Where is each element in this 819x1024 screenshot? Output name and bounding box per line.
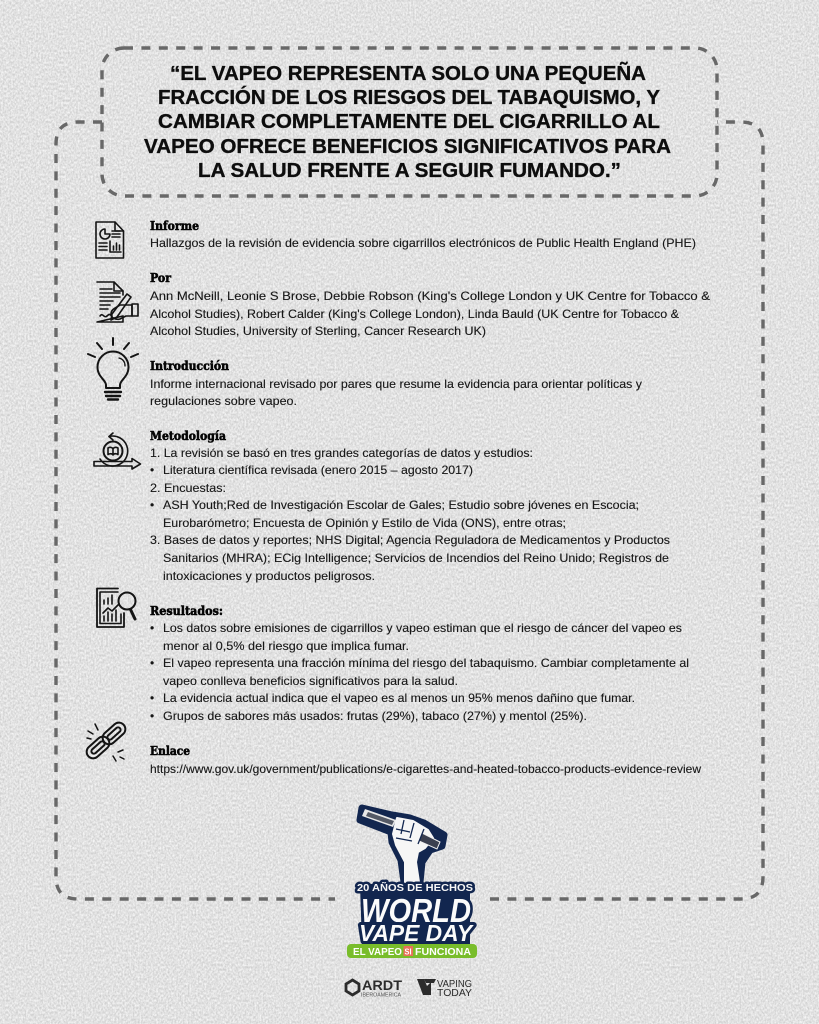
title quote: CAMBIAR COMPLETAMENTE DEL CIGARRILLO AL (158, 110, 660, 133)
section: Metodología: ASH Youth;Red de Investigación Escolar de Gales; Estudio sobre jóvenes en Escocia; (163, 498, 639, 512)
title quote: VAPEO OFRECE BENEFICIOS SIGNIFICATIVOS PARA (144, 135, 671, 158)
section: Por: Por (150, 271, 172, 285)
section: Metodología: Literatura científica revisada (enero 2015 – agosto 2017) (163, 463, 473, 477)
section: Por (150, 271, 710, 338)
section: Metodología: 3. Bases de datos y reportes; NHS Digital; Agencia Reguladora de Medicamentos y Productos (150, 533, 670, 547)
logo: navy wordmark backing (360, 884, 470, 946)
section: Metodología: Eurobarómetro; Encuesta de Opinión y Estilo de Vida (ONS), entre otras; (163, 516, 566, 530)
icon: light bulb (88, 338, 138, 400)
section: Informe (150, 219, 696, 250)
icon: chart report with magnifier (97, 588, 136, 627)
section: Informe: Informe (150, 219, 199, 233)
logo: green slogan pill: SI (404, 946, 412, 956)
section: Introducción: Introducción (150, 359, 229, 373)
section: Metodología: • (150, 463, 154, 477)
icon: broken chain link (84, 720, 128, 761)
icon: report document (96, 222, 124, 258)
section: Enlace (150, 744, 701, 776)
section: Resultados: vapeo conlleva beneficios significativos para la salud. (163, 674, 458, 688)
logo: ARDT Iberoamerica: ARDT (362, 977, 402, 993)
section: Por: Ann McNeill, Leonie S Brose, Debbie Robson (King's College London y UK Centre for Tobacco & (150, 289, 710, 303)
section: Enlace: Enlace (150, 744, 190, 758)
logo: Vape Day: VAPE DAY (359, 920, 475, 946)
logo: Vaping Today (417, 978, 472, 999)
section: Resultados: Grupos de sabores más usados: frutas (29%), tabaco (27%) y mentol (25%). (163, 709, 587, 723)
title quote (144, 62, 671, 182)
section: Metodología: Sanitarios (MHRA); ECig Intelligence; Servicios de Incendios del Reino Unido; Registros de (163, 551, 669, 565)
section: Resultados: La evidencia actual indica que el vapeo es al menos un 95% menos dañino que fumar. (163, 691, 635, 705)
logo: World Vape Day (347, 808, 477, 958)
title quote: FRACCIÓN DE LOS RIESGOS DEL TABAQUISMO, Y (158, 85, 660, 109)
logo: green slogan pill: FUNCIONA (415, 946, 471, 958)
logo: green slogan pill (347, 944, 477, 958)
section: Resultados: Resultados: (150, 604, 223, 618)
section: Resultados: • (150, 709, 154, 723)
quote box dashed frame (102, 48, 717, 196)
logo: white fist and vape device (362, 809, 440, 882)
logo: ARDT Iberoamerica (346, 977, 402, 998)
logo: ARDT Iberoamerica: IBEROAMERICA (361, 992, 401, 998)
logo: 20 años de hechos: 20 AÑOS DE HECHOS (357, 881, 473, 894)
outer dashed frame (56, 122, 763, 899)
section: Resultados (150, 604, 689, 723)
icon: document and signing hand (97, 282, 138, 322)
section: Informe: Hallazgos de la revisión de evidencia sobre cigarrillos electrónicos de Public Health England (PHE) (150, 236, 696, 250)
section: Metodología: • (150, 498, 154, 512)
section: Introducción: Informe internacional revisado por pares que resume la evidencia para orientar políticas y (150, 377, 642, 391)
section: Introducción (150, 359, 642, 408)
title quote: LA SALUD FRENTE A SEGUIR FUMANDO.” (198, 159, 621, 182)
section: Metodología: Metodología (150, 429, 226, 443)
section: Resultados: Los datos sobre emisiones de cigarrillos y vapeo estiman que el riesgo de cáncer del vapeo es (163, 621, 682, 635)
section: Por: Alcohol Studies, University of Sterling, Cancer Research UK) (150, 324, 486, 338)
section: Metodología (150, 429, 670, 583)
section: Metodología: 1. La revisión se basó en tres grandes categorías de datos y estudios: (150, 446, 533, 460)
section: Por: Alcohol Studies), Robert Calder (King's College London), Linda Bauld (UK Centre for Tobacco & (150, 307, 679, 321)
icon: book in cycle with arrow (94, 433, 140, 469)
title quote: “EL VAPEO REPRESENTA SOLO UNA PEQUEÑA (170, 62, 646, 85)
section: Introducción: regulaciones sobre vapeo. (150, 394, 297, 408)
section: Enlace: https://www.gov.uk/government/publications/e-cigarettes-and-heated-tobacco-products-evidence-review (150, 762, 701, 776)
section: Resultados: • (150, 656, 154, 670)
logo: green slogan pill: EL VAPEO (353, 946, 402, 958)
logo: Vaping Today: VAPING (437, 978, 472, 990)
section: Resultados: menor al 0,5% del riesgo que implica fumar. (163, 639, 409, 653)
section: Resultados: El vapeo representa una fracción mínima del riesgo del tabaquismo. Cambiar completamente al (163, 656, 689, 670)
section: Metodología: intoxicaciones y productos peligrosos. (163, 569, 375, 583)
logo: navy fist backing (360, 808, 444, 882)
section: Resultados: • (150, 621, 154, 635)
logo: World: WORLD (361, 892, 471, 929)
section: Metodología: 2. Encuestas: (150, 481, 226, 495)
section: Resultados: • (150, 691, 154, 705)
logo: Vaping Today: TODAY (437, 987, 472, 999)
